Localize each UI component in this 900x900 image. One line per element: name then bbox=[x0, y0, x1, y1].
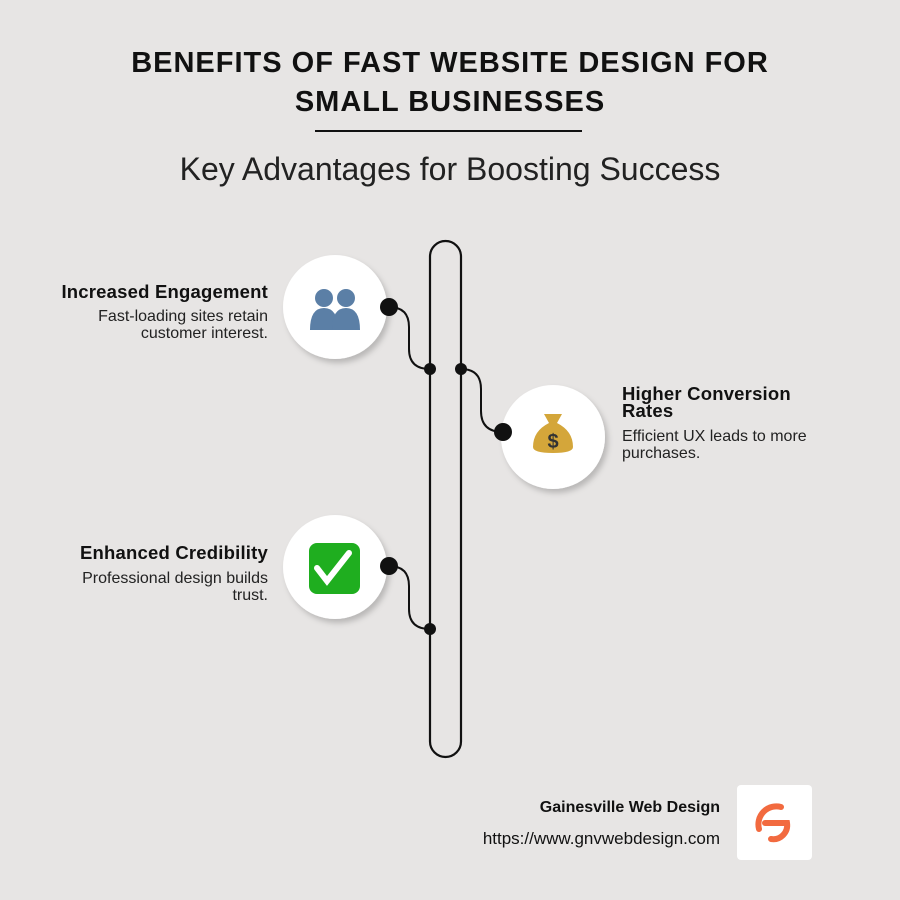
text: higher conversion bbox=[622, 383, 807, 462]
text: enhanced credibility bbox=[80, 542, 268, 604]
footer text bbox=[483, 799, 720, 848]
text: increased engagement: Increased Engagement bbox=[61, 281, 268, 302]
subtitle: Key Advantages for Boosting Success bbox=[180, 151, 720, 187]
text: enhanced credibility: Enhanced Credibility bbox=[80, 542, 268, 563]
text: higher conversion: Efficient UX leads to more bbox=[622, 428, 807, 445]
icon: people bbox=[310, 289, 360, 330]
text: higher conversion: Higher Conversion bbox=[622, 383, 791, 404]
text: increased engagement: customer interest. bbox=[141, 325, 268, 342]
text: increased engagement: Fast-loading sites retain bbox=[98, 308, 268, 325]
icon: check bbox=[309, 543, 360, 594]
footer text: Gainesville Web Design bbox=[540, 799, 720, 816]
circle: credibility bbox=[283, 515, 387, 619]
circle: engagement bbox=[283, 255, 387, 359]
circle: conversion bbox=[501, 385, 605, 489]
title: BENEFITS OF FAST WEBSITE DESIGN FOR bbox=[131, 47, 769, 79]
text: higher conversion: Rates bbox=[622, 400, 673, 421]
text: enhanced credibility: Professional design builds bbox=[82, 570, 268, 587]
logo bbox=[737, 785, 812, 860]
text: higher conversion: purchases. bbox=[622, 445, 700, 462]
text: enhanced credibility: trust. bbox=[232, 587, 268, 604]
title bbox=[131, 47, 769, 118]
title underline bbox=[315, 130, 582, 132]
icon: money bag: $ bbox=[547, 431, 559, 453]
footer text: https://www.gnvwebdesign.com bbox=[483, 829, 720, 848]
title: SMALL BUSINESSES bbox=[295, 86, 605, 118]
text: increased engagement bbox=[61, 281, 268, 342]
